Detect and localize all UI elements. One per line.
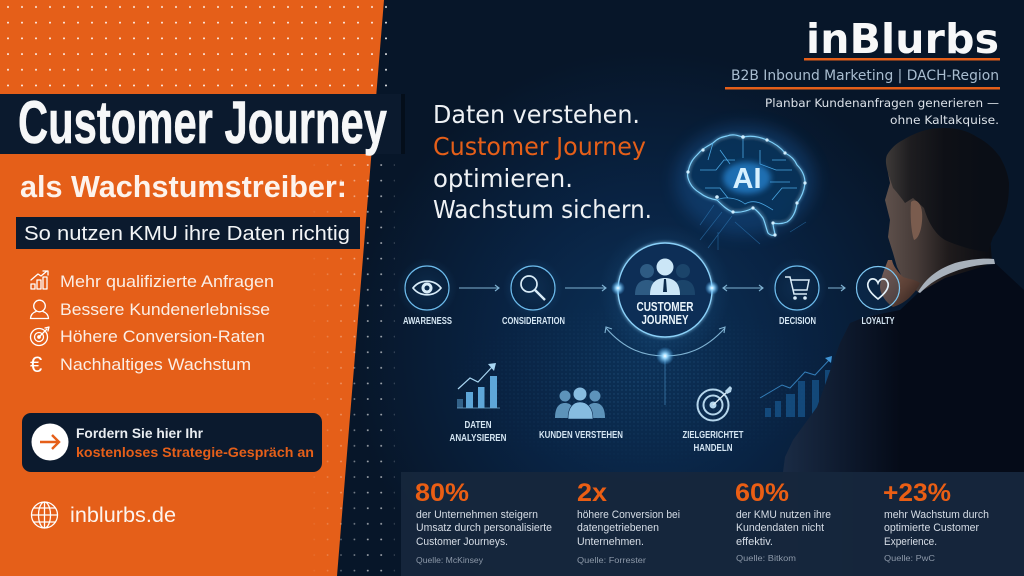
headline [433, 100, 652, 224]
claim: Planbar Kundenanfragen generieren — [765, 96, 999, 110]
stat: 80%: Customer Journeys. [416, 536, 508, 548]
icon: arrow in circle [32, 424, 68, 460]
stat: 60%: effektiv. [736, 536, 773, 548]
stat: 2x: datengetriebenen [577, 522, 659, 534]
node: awareness [397, 258, 457, 327]
website: inblurbs.de [70, 504, 176, 527]
stat: +23%: Experience. [884, 536, 937, 548]
headline: Daten verstehen. [433, 100, 640, 129]
stat: 2x: 2x [577, 479, 607, 507]
collar [918, 259, 995, 293]
node: consideration [502, 258, 565, 327]
cycle arc [605, 327, 725, 405]
arrow [459, 285, 499, 291]
neck and face [885, 150, 992, 292]
hand [880, 260, 920, 307]
logo: inBlurbs [806, 15, 999, 63]
headline: Wachstum sichern. [433, 195, 652, 224]
cta line 1: Fordern Sie hier Ihr [76, 426, 204, 441]
logo block: ohne Kaltakquise. [890, 113, 999, 127]
icon group: targeted action: HANDELN [694, 442, 732, 454]
stat: 80%: 80% [415, 479, 469, 507]
stat: 2x: Quelle: Forrester [577, 555, 646, 565]
stat: 60%: Quelle: Bitkom [736, 553, 796, 563]
node: decision: DECISION [779, 315, 816, 327]
icon group: data analysis [450, 363, 506, 444]
man seen from behind [770, 128, 1024, 576]
orange panel [0, 0, 384, 576]
benefits list [30, 271, 274, 377]
benefit 2: Bessere Kundenerlebnisse [60, 300, 270, 319]
stat: 2x: Unternehmen. [577, 536, 644, 548]
tagline: B2B Inbound Marketing | DACH-Region [731, 68, 999, 84]
arrow [565, 285, 606, 291]
stat: 2x [577, 479, 680, 565]
website [32, 502, 176, 528]
stat: 2x: höhere Conversion bei [577, 509, 680, 521]
headline: Customer Journey [433, 132, 646, 161]
faint chart behind man [760, 356, 832, 417]
subtitle bar [16, 217, 360, 249]
hair [886, 128, 1009, 252]
stat: 60%: 60% [735, 479, 789, 507]
subtitle bar: So nutzen KMU ihre Daten richtig [24, 223, 350, 245]
icon group: data analysis: ANALYSIEREN [450, 432, 506, 444]
icon: target [30, 327, 49, 346]
arrow [828, 285, 845, 291]
icon group: understand customers: KUNDEN VERSTEHEN [539, 429, 623, 441]
dot pattern top [0, 0, 392, 92]
benefit 1: Mehr qualifizierte Anfragen [60, 272, 274, 291]
stat: +23%: mehr Wachstum durch [884, 509, 989, 521]
stat: +23% [883, 479, 989, 563]
node: customer journey hub: JOURNEY [642, 312, 689, 327]
dot pattern lower [314, 164, 395, 572]
stat: +23%: +23% [883, 479, 951, 507]
node: loyalty: LOYALTY [862, 315, 894, 327]
headline: optimieren. [433, 164, 573, 193]
cta line 2: kostenloses Strategie-Gespräch an [76, 445, 314, 460]
stat: +23%: Quelle: PwC [884, 553, 935, 563]
ear [911, 200, 922, 240]
node: customer journey hub: CUSTOMER [636, 299, 694, 314]
stat: 80%: der Unternehmen steigern [416, 509, 538, 521]
icon: growth chart [31, 271, 48, 289]
AI brain [675, 125, 815, 250]
AI label: AI [732, 163, 762, 195]
stat: 80% [415, 479, 552, 565]
node: consideration: CONSIDERATION [502, 315, 565, 327]
icon: globe [32, 502, 58, 528]
stat: +23%: optimierte Customer [884, 522, 979, 534]
benefit 4: Nachhaltiges Wachstum [60, 355, 251, 374]
title bar [0, 89, 405, 156]
icon: euro: € [30, 352, 42, 377]
call to action [22, 413, 322, 472]
stat: 60% [735, 479, 831, 563]
subtitle line: als Wachstumstreiber: [20, 169, 347, 204]
faint world map dots [482, 322, 798, 450]
journey flow [397, 224, 845, 405]
node: decision [767, 258, 827, 327]
suit [770, 263, 1024, 576]
stats band [401, 472, 1024, 576]
stat: 60%: Kundendaten nicht [736, 522, 824, 534]
node: customer journey hub [599, 224, 731, 356]
double arrow [723, 285, 763, 291]
node: awareness: AWARENESS [403, 315, 452, 327]
node: loyalty [856, 266, 900, 327]
icon group: data analysis: DATEN [464, 419, 492, 431]
title: Customer Journey [18, 89, 387, 156]
stat: 80%: Umsatz durch personalisierte [416, 522, 552, 534]
icon: person [30, 300, 48, 318]
icon group: targeted action [682, 386, 744, 454]
stat: 80%: Quelle: McKinsey [416, 555, 484, 565]
benefit 3: Höhere Conversion-Raten [60, 327, 265, 346]
icon group: targeted action: ZIELGERICHTET [682, 429, 744, 441]
stat: 60%: der KMU nutzen ihre [736, 509, 831, 521]
icon group: understand customers [539, 388, 623, 441]
logo block [725, 15, 1000, 127]
